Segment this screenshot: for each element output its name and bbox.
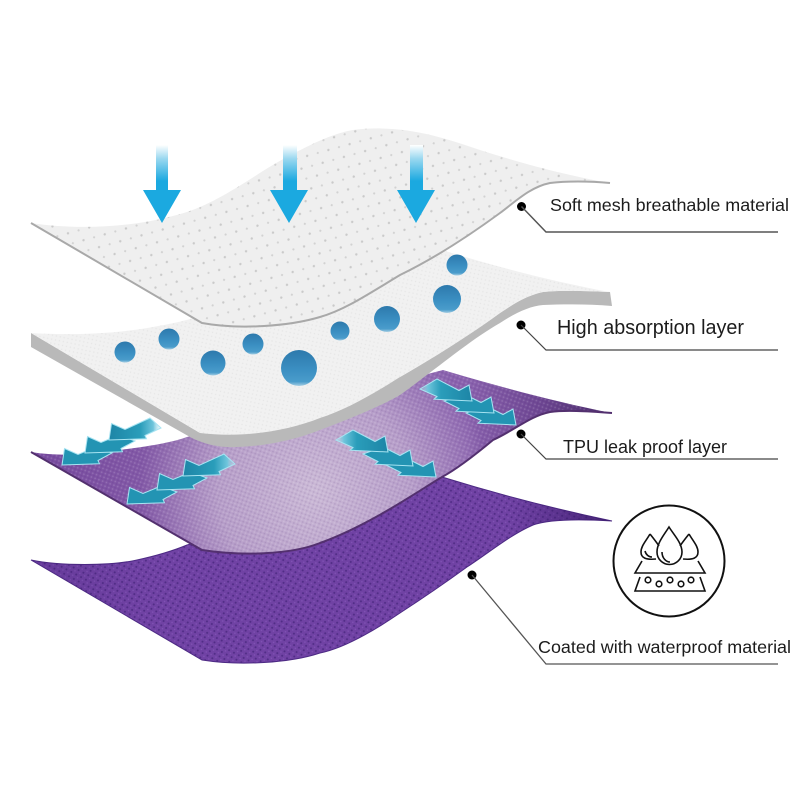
arrow: blue down centre	[270, 145, 308, 223]
droplets: absorbed moisture	[114, 254, 468, 386]
callout: TPU leak proof layer: TPU leak proof layer	[563, 437, 727, 457]
arrow: blue down right	[397, 145, 435, 223]
arrows: teal flow, centre right	[336, 430, 436, 477]
callout: coated with waterproof material	[468, 570, 791, 664]
callout: soft mesh breathable material: Soft mesh breathable material	[550, 195, 789, 215]
callout: high absorption layer: High absorption layer	[557, 317, 744, 339]
callout: soft mesh breathable material	[517, 195, 789, 232]
layer: coated waterproof purple base	[31, 477, 612, 663]
callout: TPU leak proof layer	[516, 430, 778, 459]
arrows: teal flow, far left	[62, 418, 161, 465]
layer: high absorption white sheet	[31, 250, 612, 447]
callout: high absorption layer	[516, 317, 778, 350]
layer: TPU leak proof purple sheet	[31, 370, 612, 554]
arrow: blue down left	[143, 145, 181, 223]
callout: coated with waterproof material: Coated with waterproof material	[538, 637, 791, 657]
layer: soft mesh breathable top sheet	[31, 128, 610, 327]
arrows: teal flow, far right	[420, 379, 516, 425]
icon: waterproof droplets badge	[614, 506, 724, 616]
arrows: teal flow, centre left	[127, 454, 235, 504]
